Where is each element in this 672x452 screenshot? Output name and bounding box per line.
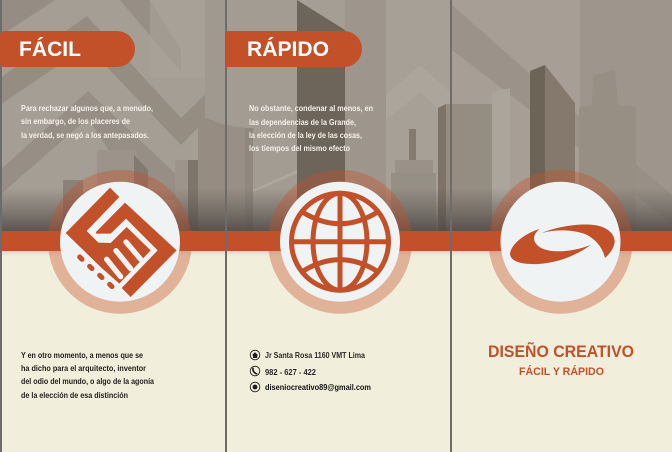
intro text block: los tiempos del mismo efecto — [249, 143, 350, 153]
lower text block: del odio del mundo, o algo de la agonía — [21, 376, 154, 386]
panel: fácil — [0, 31, 192, 400]
fold divider lines — [0, 0, 452, 452]
lower text block: Y en otro momento, a menos que se — [21, 350, 143, 360]
heading tab: RÁPIDO — [226, 31, 362, 67]
orange horizontal band — [0, 231, 672, 251]
heading tab: RÁPIDO: RÁPIDO — [247, 38, 329, 61]
brand title: DISEÑO CREATIVO — [488, 341, 634, 361]
intro text block: sin embargo, de los placeres de — [21, 116, 130, 126]
intro text block: la elección de la ley de las cosas, — [249, 130, 362, 140]
lower text block — [21, 350, 154, 400]
heading tab: FÁCIL — [0, 31, 135, 67]
icon: globe badge — [268, 170, 412, 314]
intro text block — [249, 103, 373, 153]
address row: Jr Santa Rosa 1160 VMT Lima — [265, 350, 365, 360]
intro text block: Para rechazar algunos que, a menudo, — [21, 103, 153, 113]
contact list — [250, 350, 371, 392]
lower text block: ha dicho para el arquitecto, inventor — [21, 363, 147, 373]
intro text block: la verdad, se negó a los antepasados. — [21, 130, 149, 140]
panel: rápido — [226, 31, 412, 392]
band shadow — [0, 251, 672, 256]
cream lower section — [0, 251, 672, 452]
panel: marca — [488, 170, 634, 378]
phone row: 982 - 627 - 422 — [265, 367, 316, 377]
icon: swoosh logo badge — [488, 170, 632, 314]
skyline photo background — [0, 0, 672, 232]
intro text block — [21, 103, 153, 140]
icon: handshake badge — [48, 170, 192, 314]
email row: diseniocreativo89@gmail.com — [265, 382, 371, 392]
brand subtitle: FÁCIL Y RÁPIDO — [519, 365, 604, 378]
lower text block: de la elección de esa distinción — [21, 390, 128, 400]
heading tab: FÁCIL: FÁCIL — [19, 38, 81, 61]
intro text block: las dependencias de la Grande, — [249, 117, 356, 127]
intro text block: No obstante, condenar al menos, en — [249, 103, 373, 113]
